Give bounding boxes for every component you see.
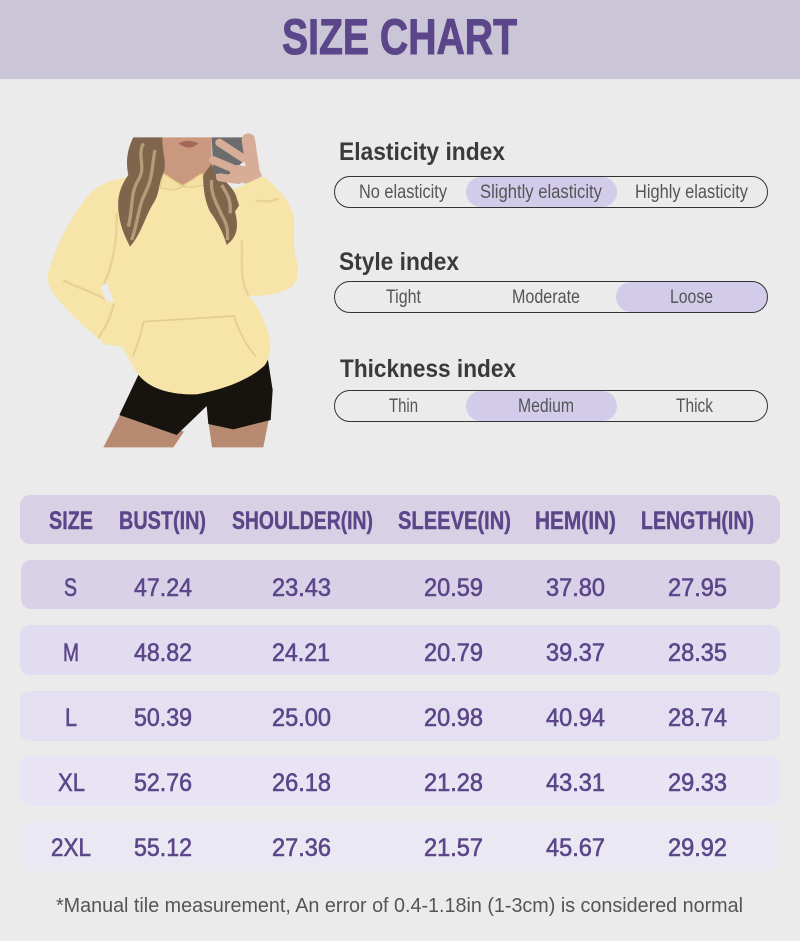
thickness scale outline <box>334 390 768 422</box>
hair <box>118 137 239 247</box>
row L: 25.00 <box>272 704 331 732</box>
table header row: LENGTH(IN) <box>641 507 754 535</box>
title: SIZE CHART <box>282 9 517 65</box>
row S: 27.95 <box>668 574 727 602</box>
row M: M <box>63 639 79 667</box>
elasticity index <box>334 138 768 208</box>
elasticity heading: Elasticity index <box>339 138 505 166</box>
row S: 47.24 <box>134 574 192 602</box>
hood <box>160 173 205 190</box>
thickness heading: Thickness index <box>340 355 516 383</box>
elasticity options: Highly elasticity <box>635 182 748 203</box>
row L: 20.98 <box>424 704 483 732</box>
hoodie <box>48 173 298 394</box>
row M: 48.82 <box>134 639 192 667</box>
thickness highlight <box>466 391 617 421</box>
row XL: 29.33 <box>668 769 727 797</box>
sleeve cuff <box>234 177 270 208</box>
style options <box>386 287 713 308</box>
elasticity options <box>359 182 748 203</box>
style highlight <box>616 282 768 312</box>
row L: 28.74 <box>668 704 727 732</box>
row 2XL: 55.12 <box>134 834 192 862</box>
row L: 40.94 <box>546 704 605 732</box>
row 2XL: 2XL <box>51 834 91 862</box>
sleeve and body shading <box>63 197 278 338</box>
legs <box>103 415 269 447</box>
row XL: 43.31 <box>546 769 605 797</box>
row XL: 52.76 <box>134 769 192 797</box>
style heading: Style index <box>339 248 459 276</box>
table header row: BUST(IN) <box>119 507 206 535</box>
row XL: 26.18 <box>272 769 331 797</box>
thickness options: Thick <box>676 396 713 417</box>
row L: L <box>65 704 77 732</box>
face and neck <box>162 137 212 186</box>
elasticity scale outline <box>334 176 768 208</box>
lips <box>178 141 198 147</box>
thickness index <box>334 355 768 422</box>
table header row: SIZE <box>49 507 93 535</box>
row 2XL: 27.36 <box>272 834 331 862</box>
title banner <box>0 0 800 79</box>
row M: 20.79 <box>424 639 483 667</box>
row M: 28.35 <box>668 639 727 667</box>
thickness options <box>389 396 713 417</box>
row S: S <box>64 574 77 602</box>
style index <box>334 248 768 312</box>
model photo: yellow hoodie <box>48 137 298 447</box>
style scale outline <box>334 282 768 312</box>
table header row: SHOULDER(IN) <box>232 507 373 535</box>
row 2XL: 29.92 <box>668 834 727 862</box>
row M: 24.21 <box>272 639 330 667</box>
row S: 23.43 <box>272 574 331 602</box>
thickness options: Thin <box>389 396 418 417</box>
table header row: SLEEVE(IN) <box>398 507 511 535</box>
size table <box>20 495 780 871</box>
row S <box>21 560 780 609</box>
row 2XL <box>20 821 780 871</box>
thickness options: Medium <box>518 396 574 417</box>
pocket <box>133 316 256 357</box>
style options: Loose <box>670 287 713 308</box>
elasticity options: No elasticity <box>359 182 447 203</box>
row XL <box>20 756 780 806</box>
row L <box>20 691 780 741</box>
elasticity highlight <box>466 177 617 207</box>
table header row: HEM(IN) <box>535 507 616 535</box>
row XL: XL <box>58 769 85 797</box>
row M <box>20 625 780 675</box>
style options: Tight <box>386 287 422 308</box>
row S: 37.80 <box>546 574 605 602</box>
row L: 50.39 <box>134 704 192 732</box>
table header row <box>20 495 780 544</box>
elasticity options: Slightly elasticity <box>480 182 602 203</box>
arm gap <box>101 283 114 303</box>
phone <box>212 137 247 177</box>
hair highlights <box>128 143 230 240</box>
shorts <box>119 360 273 435</box>
measurement footnote: *Manual tile measurement, An error of 0.4-1.18in (1-3cm) is considered normal <box>56 895 743 917</box>
row XL: 21.28 <box>424 769 483 797</box>
row 2XL: 21.57 <box>424 834 483 862</box>
row S: 20.59 <box>424 574 483 602</box>
row M: 39.37 <box>546 639 605 667</box>
style options: Moderate <box>512 287 580 308</box>
row 2XL: 45.67 <box>546 834 605 862</box>
hand <box>213 140 253 180</box>
